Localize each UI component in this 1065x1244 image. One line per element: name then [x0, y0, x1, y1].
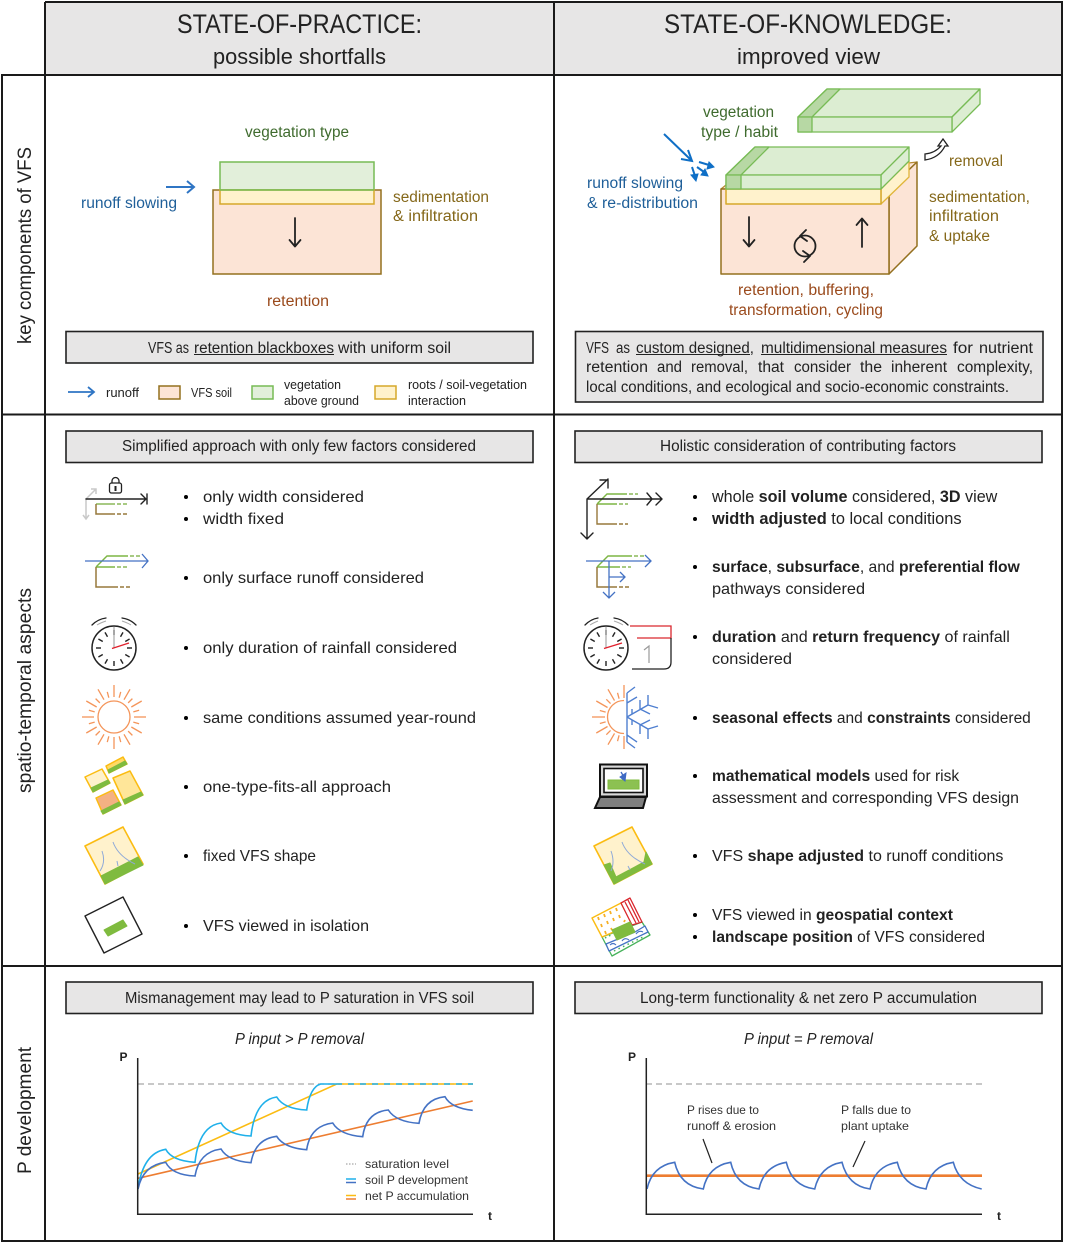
- icon: fixed VFS shape: [85, 827, 143, 884]
- label: sedimentation, infiltration and uptake: [929, 189, 1030, 245]
- text: mathematical models: assessment and corresponding VFS design: [712, 790, 1019, 807]
- label: vegetation type / habit: type / habit: [701, 124, 779, 141]
- icon: sun: [82, 685, 146, 749]
- callout: retention blackboxes: VFS as: [148, 340, 189, 357]
- label: vegetation type / habit: [701, 104, 779, 141]
- text: only width considered: width fixed: [202, 511, 284, 528]
- diagram: removed vegetation block: [798, 89, 980, 132]
- label: sedimentation, infiltration and uptake: sedimentation,: [929, 189, 1030, 206]
- label: vegetation type / habit: vegetation: [703, 104, 774, 121]
- text: flow pathways: pathways considered: [712, 581, 865, 598]
- annotation: P rises: [687, 1103, 776, 1163]
- header: state-of-knowledge: improved view: [737, 44, 880, 69]
- label: retention, buffering, transformation, cycling: [729, 282, 883, 319]
- header: state-of-knowledge: [554, 2, 1062, 75]
- text: whole soil volume: width adjusted to local conditions: [711, 510, 962, 528]
- chart legend: soil P development: [365, 1173, 469, 1187]
- header: state-of-knowledge: STATE-OF-KNOWLEDGE:: [664, 9, 952, 39]
- callout: retention blackboxes: retention blackboxes: [194, 340, 334, 357]
- annotation: P rises: P rises due to: [687, 1103, 759, 1117]
- text: duration and return frequency: duration and return frequency of rainfall: [712, 628, 1010, 646]
- diagram: soil and vegetation block: [213, 162, 381, 274]
- legend: vegetation: [284, 378, 341, 392]
- row label: P development: P development: [15, 1046, 36, 1174]
- annotation: P falls: plant uptake: [841, 1119, 909, 1133]
- text: same conditions year-round: same conditions assumed year-round: [203, 710, 476, 727]
- label: vegetation type: vegetation type: [245, 124, 349, 141]
- text: flow pathways: surface, subsurface, and preferential flow: [712, 559, 1021, 576]
- text: whole soil volume: whole soil volume considered, 3D view: [711, 488, 998, 506]
- label: sedimentation and infiltration: [393, 189, 489, 225]
- panel: knowledge key components: [576, 89, 1043, 402]
- heading box: simplified approach: [66, 431, 533, 462]
- callout: custom designed measures: the: [860, 359, 882, 376]
- text: one-type-fits-all: one-type-fits-all approach: [203, 779, 391, 796]
- chart: P saturation: t: [488, 1209, 492, 1223]
- callout: custom designed measures: for: [953, 340, 973, 357]
- callout: custom designed measures: local conditions, and ecological and socio-economic constraints.: [586, 379, 1009, 396]
- heading box: mismanagement: [66, 982, 533, 1014]
- text: geospatial context: [693, 907, 985, 946]
- annotation: P rises: runoff & erosion: [687, 1119, 776, 1133]
- header: state-of-practice: possible shortfalls: [213, 44, 386, 69]
- heading box: holistic consideration: Holistic consideration of contributing factors: [660, 438, 956, 455]
- label: runoff slowing: runoff slowing: [81, 195, 177, 212]
- icon: adjusted VFS shape: [594, 827, 652, 884]
- label: runoff slowing and re-distribution: [587, 175, 698, 212]
- icon: flow pathways: [586, 555, 651, 598]
- chart legend: [346, 1157, 469, 1203]
- chart legend: saturation level: [365, 1157, 449, 1171]
- icon: clock and calendar: [584, 618, 671, 670]
- header: state-of-practice: STATE-OF-PRACTICE:: [177, 9, 422, 39]
- chart: net zero P accumulation: P: [628, 1050, 636, 1064]
- row label: key components of VFS: key components of VFS: [15, 147, 36, 344]
- legend: roots / soil-vegetation: [408, 378, 527, 392]
- text: geospatial context: landscape position of VFS considered: [712, 929, 985, 946]
- callout: custom designed measures: as: [616, 340, 630, 357]
- icon: laptop with model: [595, 764, 647, 808]
- text: whole soil volume: [693, 488, 998, 528]
- icon: clock: [92, 618, 136, 670]
- arrow: runoff: [166, 181, 194, 193]
- row label: spatio-temporal aspects: spatio-temporal aspects: [15, 588, 36, 793]
- heading box: long-term functionality: Long-term functionality & net zero P accumulation: [640, 990, 977, 1007]
- callout: custom designed measures: retention: [586, 359, 648, 376]
- icon: 3D view axes: [581, 479, 662, 539]
- arrow: removal: [925, 139, 948, 160]
- annotation: P falls: [841, 1103, 911, 1167]
- label: sedimentation, infiltration and uptake: & uptake: [929, 228, 990, 245]
- icon: surface runoff only: [85, 554, 148, 587]
- text: VFS in isolation: VFS viewed in isolation: [203, 918, 369, 935]
- subtitle: P input equals removal: P input = P removal: [744, 1031, 874, 1048]
- label: sedimentation and infiltration: & infiltration: [393, 208, 478, 225]
- callout: retention blackboxes: with uniform soil: [337, 340, 451, 357]
- legend: above ground: [284, 394, 359, 408]
- label: sedimentation and infiltration: sedimentation: [393, 189, 489, 206]
- label: runoff slowing and re-distribution: & re-distribution: [587, 195, 698, 212]
- text: VFS shape adjusted: VFS shape adjusted to runoff conditions: [712, 848, 1003, 865]
- icon: fixed width with lock: [83, 478, 147, 519]
- text: duration of rainfall: only duration of rainfall considered: [203, 640, 457, 657]
- callout: custom designed measures: [576, 332, 1043, 402]
- icon: one-type-fits-all plots: [85, 757, 143, 814]
- annotation: P falls: P falls due to: [841, 1103, 911, 1117]
- chart: net zero P accumulation: t: [997, 1209, 1001, 1223]
- callout: custom designed measures: inherent: [891, 359, 948, 376]
- heading box: simplified approach: Simplified approach with only few factors considered: [122, 438, 476, 455]
- legend: VFS soil: [191, 386, 232, 400]
- callout: custom designed measures: custom designed,: [636, 340, 754, 357]
- callout: custom designed measures: multidimensional measures: [761, 340, 947, 357]
- text: only width considered: only width considered: [203, 489, 364, 506]
- callout: custom designed measures: VFS: [586, 340, 609, 357]
- icon: half sun half snowflake: [592, 685, 658, 749]
- text: only surface runoff: only surface runoff considered: [203, 570, 424, 587]
- text: geospatial context: VFS viewed in geospatial context: [712, 907, 953, 924]
- chart legend: net P accumulation: [365, 1189, 469, 1203]
- chart: P saturation: [120, 1050, 492, 1223]
- label: retention, buffering, transformation, cycling: transformation, cycling: [729, 302, 883, 319]
- label: retention: retention: [267, 293, 329, 310]
- label: removal: removal: [949, 153, 1003, 170]
- text: mathematical models: [693, 768, 1019, 807]
- label: runoff slowing and re-distribution: runoff slowing: [587, 175, 683, 192]
- callout: custom designed measures: that: [758, 359, 785, 376]
- icon: VFS in isolation: [85, 897, 142, 953]
- panel: practice key components: [66, 124, 533, 408]
- header: state-of-practice: [45, 2, 554, 75]
- text: fixed VFS shape: fixed VFS shape: [203, 848, 316, 865]
- callout: retention blackboxes: [66, 332, 533, 363]
- chart: P saturation: P: [120, 1050, 128, 1064]
- callout: custom designed measures: and: [657, 359, 682, 376]
- callout: custom designed measures: complexity,: [957, 359, 1033, 376]
- legend: runoff: [106, 386, 140, 400]
- callout: custom designed measures: nutrient: [979, 340, 1034, 357]
- icon: geospatial context: [592, 898, 650, 956]
- text: duration and return frequency: [693, 628, 1010, 668]
- diagram: soil block with vegetation: [721, 147, 917, 274]
- callout: custom designed measures: removal,: [691, 359, 748, 376]
- text: seasonal effects: seasonal effects and constraints considered: [712, 710, 1031, 727]
- callout: custom designed measures: consider: [794, 359, 851, 376]
- subtitle: P input greater than removal: P input > P removal: [235, 1031, 365, 1048]
- text: duration and return frequency: considered: [712, 651, 792, 668]
- heading box: holistic consideration: [575, 431, 1042, 462]
- heading box: mismanagement: Mismanagement may lead to P saturation in VFS soil: [125, 990, 474, 1007]
- text: mathematical models: mathematical models used for risk: [712, 768, 959, 785]
- legend: [68, 378, 527, 408]
- text: only width considered: [184, 489, 364, 528]
- heading box: long-term functionality: [575, 982, 1042, 1014]
- legend: interaction: [408, 394, 466, 408]
- label: sedimentation, infiltration and uptake: infiltration: [929, 208, 999, 225]
- label: retention, buffering, transformation, cycling: retention, buffering,: [738, 282, 874, 299]
- text: flow pathways: [693, 559, 1021, 598]
- chart: net zero P accumulation: [628, 1050, 1001, 1223]
- arrows: runoff redistribution: [664, 134, 714, 181]
